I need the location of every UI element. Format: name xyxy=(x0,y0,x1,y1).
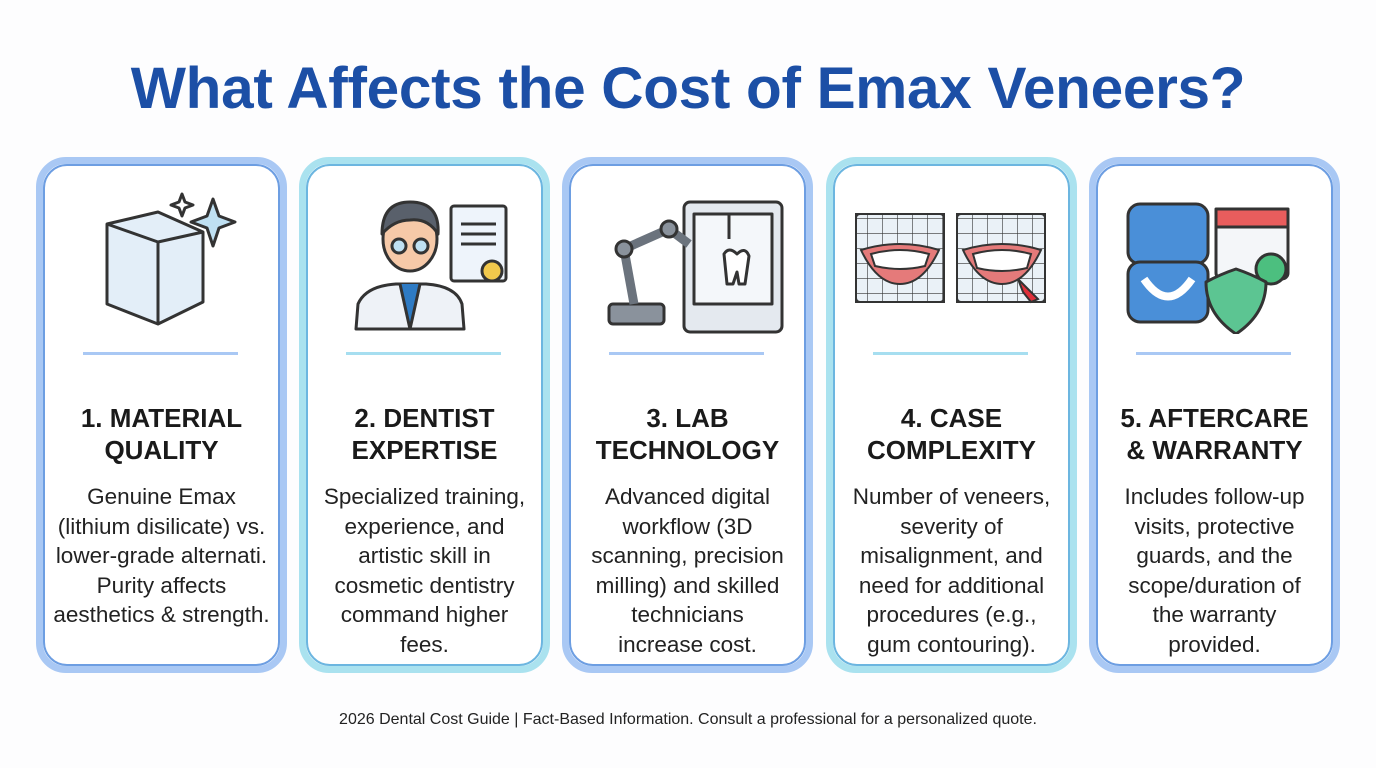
text: fees. xyxy=(400,632,449,656)
text: cosmetic dentistry xyxy=(334,572,515,598)
text: Advanced digital xyxy=(605,484,770,509)
text: increase cost. xyxy=(618,632,757,656)
heading: & WARRANTY xyxy=(1126,435,1303,465)
heading: QUALITY xyxy=(104,435,219,465)
panel: case complexity xyxy=(826,157,1077,673)
heading xyxy=(352,403,497,465)
icon: dentist xyxy=(354,200,508,330)
heading xyxy=(596,403,779,465)
footer: 2026 Dental Cost Guide | Fact-Based Information. Consult a professional for a personalized quote. xyxy=(339,711,1037,728)
text xyxy=(1124,484,1305,656)
text: gum contouring). xyxy=(867,632,1036,656)
title: What Affects the Cost of Emax Veneers? xyxy=(131,56,1245,121)
text: misalignment, and xyxy=(860,543,1043,568)
text xyxy=(591,484,784,656)
heading: 3. LAB xyxy=(646,403,729,433)
text: scanning, precision xyxy=(591,543,784,568)
text: command higher xyxy=(341,602,508,627)
heading: 4. CASE xyxy=(901,403,1002,433)
text: milling) and skilled xyxy=(596,572,779,598)
text xyxy=(853,484,1050,656)
heading: 2. DENTIST xyxy=(354,403,495,433)
text: Includes follow-up xyxy=(1124,484,1305,509)
text: aesthetics & strength. xyxy=(53,602,270,627)
panel: dentist expertise xyxy=(299,157,550,673)
heading: COMPLEXITY xyxy=(867,435,1036,465)
text: the warranty xyxy=(1153,602,1276,627)
text: guards, and the xyxy=(1136,543,1293,568)
text: Genuine Emax xyxy=(87,484,236,509)
text: technicians xyxy=(631,602,744,627)
heading: TECHNOLOGY xyxy=(596,435,779,465)
heading: EXPERTISE xyxy=(352,435,497,465)
text xyxy=(324,484,525,656)
text: experience, and xyxy=(344,514,505,538)
text: workflow (3D xyxy=(622,514,753,538)
text: procedures (e.g., xyxy=(866,602,1037,627)
icon: smile grids xyxy=(855,213,1046,304)
heading xyxy=(867,403,1036,465)
text: Number of veneers, xyxy=(853,484,1050,509)
text: lower-grade alternati. xyxy=(56,543,267,568)
heading: 5. AFTERCARE xyxy=(1120,403,1309,433)
text: Purity affects xyxy=(97,572,226,598)
text xyxy=(53,484,270,627)
panel: aftercare & warranty xyxy=(1089,157,1340,673)
text: need for additional xyxy=(859,572,1044,598)
text: visits, protective xyxy=(1134,514,1295,538)
text: provided. xyxy=(1168,632,1261,656)
text: (lithium disilicate) vs. xyxy=(58,514,265,538)
text: Specialized training, xyxy=(324,484,525,509)
icon: robot arm and mill xyxy=(608,200,784,334)
panel: lab technology xyxy=(562,157,813,673)
heading xyxy=(1120,403,1309,465)
text: scope/duration of xyxy=(1128,572,1301,598)
text: severity of xyxy=(900,514,1003,538)
heading: 1. MATERIAL xyxy=(81,403,242,433)
icon: cube xyxy=(106,192,236,326)
text: artistic skill in xyxy=(358,543,491,568)
icon: guard case, calendar, shield xyxy=(1126,202,1290,334)
panel: material quality xyxy=(36,157,287,673)
heading xyxy=(81,403,242,465)
